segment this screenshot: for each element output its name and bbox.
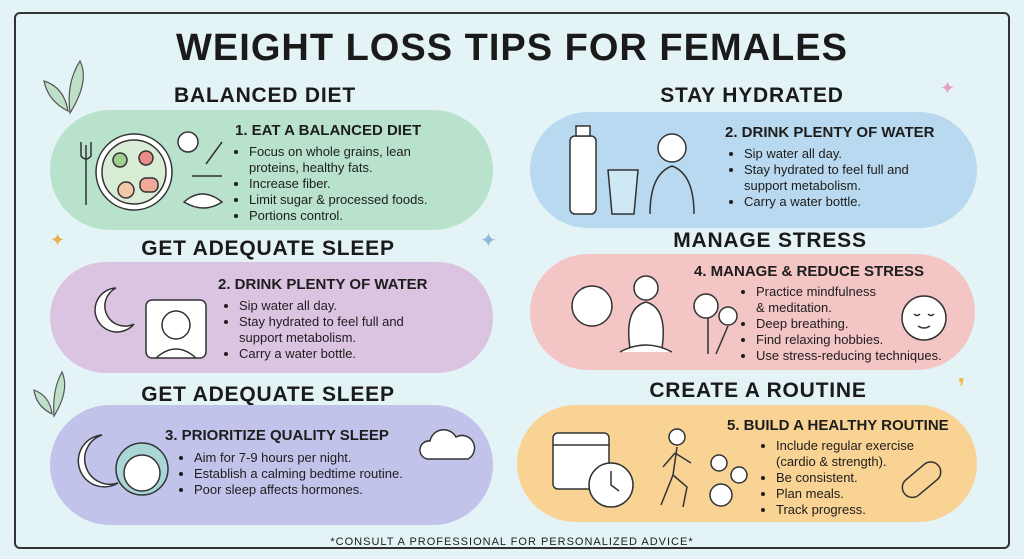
panel: sleep / water: Carry a water bottle. — [239, 346, 356, 361]
icon: leaves — [43, 60, 84, 115]
panel: hydration: Stay hydrated to feel full and — [744, 162, 909, 177]
panel: stress: Deep breathing. — [756, 316, 849, 331]
panel: sleep / water: Stay hydrated to feel full and — [239, 314, 404, 329]
icon: sparkles right: ✦ — [480, 230, 497, 252]
icon: bottle, glass, woman drinking — [569, 125, 695, 215]
heading: balanced diet: BALANCED DIET — [174, 84, 356, 107]
text: build a healthy routine: 5. BUILD A HEALTHY ROUTINE — [727, 417, 949, 434]
panel: stress — [530, 254, 975, 370]
panel: hydration: Carry a water bottle. — [744, 194, 861, 209]
panel: quality sleep — [50, 405, 493, 525]
text: eat a balanced diet: 1. EAT A BALANCED DIET — [235, 122, 421, 139]
panel: sleep / water: support metabolism. — [239, 330, 356, 345]
panel: hydration: support metabolism. — [744, 178, 861, 193]
panel: stress: Use stress-reducing techniques. — [756, 348, 942, 363]
panel: quality sleep: Aim for 7-9 hours per night. — [194, 450, 352, 465]
panel: balanced diet: Limit sugar & processed foods. — [249, 192, 427, 207]
text: manage & reduce stress: 4. MANAGE & REDUCE STRESS — [694, 263, 924, 280]
icon: leaves lower — [33, 370, 66, 418]
panel: routine: Include regular exercise — [776, 438, 914, 453]
panel: stress: & meditation. — [756, 300, 832, 315]
panel: balanced diet: proteins, healthy fats. — [249, 160, 373, 175]
panel: quality sleep: Establish a calming bedtime routine. — [194, 466, 403, 481]
heading: get adequate sleep 2: GET ADEQUATE SLEEP — [141, 383, 395, 406]
panel: balanced diet: Increase fiber. — [249, 176, 331, 191]
text: drink plenty of water: 2. DRINK PLENTY OF WATER — [218, 276, 427, 293]
icon: plate and food — [80, 131, 224, 211]
icon: ball, meditating woman, flowers — [571, 275, 738, 354]
icon: calendar, clock, runner, gears — [552, 428, 748, 508]
panel: balanced diet: Focus on whole grains, lean — [249, 144, 411, 159]
icon: moon and face — [78, 434, 169, 496]
heading: manage stress: MANAGE STRESS — [673, 229, 867, 252]
footer: *CONSULT A PROFESSIONAL FOR PERSONALIZED ADVICE* — [330, 536, 694, 548]
text: drink plenty of water: 2. DRINK PLENTY OF WATER — [725, 124, 934, 141]
icon: moon and pillow — [94, 287, 207, 359]
icon: cloud — [419, 429, 476, 460]
panel: routine: Plan meals. — [776, 486, 844, 501]
panel: quality sleep: Poor sleep affects hormones. — [194, 482, 363, 497]
panel: stress: Practice mindfulness — [756, 284, 876, 299]
panel: sleep / water: Sip water all day. — [239, 298, 337, 313]
panel: hydration — [530, 112, 977, 228]
panel: balanced diet: Portions control. — [249, 208, 343, 223]
panel: routine — [517, 405, 977, 522]
heading: get adequate sleep: GET ADEQUATE SLEEP — [141, 237, 395, 260]
heading: stay hydrated: STAY HYDRATED — [660, 84, 844, 107]
panel: routine: (cardio & strength). — [776, 454, 887, 469]
icon: calm face — [901, 295, 947, 341]
icon: splash: ❜ — [958, 374, 965, 399]
panel: balanced diet — [50, 110, 493, 230]
icon: sparkle: ✦ — [50, 230, 65, 250]
icon: sparkles top right: ✦ — [940, 78, 955, 98]
panel: hydration: Sip water all day. — [744, 146, 842, 161]
panel: routine: Be consistent. — [776, 470, 858, 485]
heading: create a routine: CREATE A ROUTINE — [649, 379, 867, 402]
panel: routine: Track progress. — [776, 502, 866, 517]
title: WEIGHT LOSS TIPS FOR FEMALES — [176, 27, 848, 69]
icon: resistance band — [902, 461, 942, 498]
panel: sleep / water — [50, 262, 493, 373]
panel: stress: Find relaxing hobbies. — [756, 332, 883, 347]
text: prioritize quality sleep: 3. PRIORITIZE QUALITY SLEEP — [165, 427, 389, 444]
